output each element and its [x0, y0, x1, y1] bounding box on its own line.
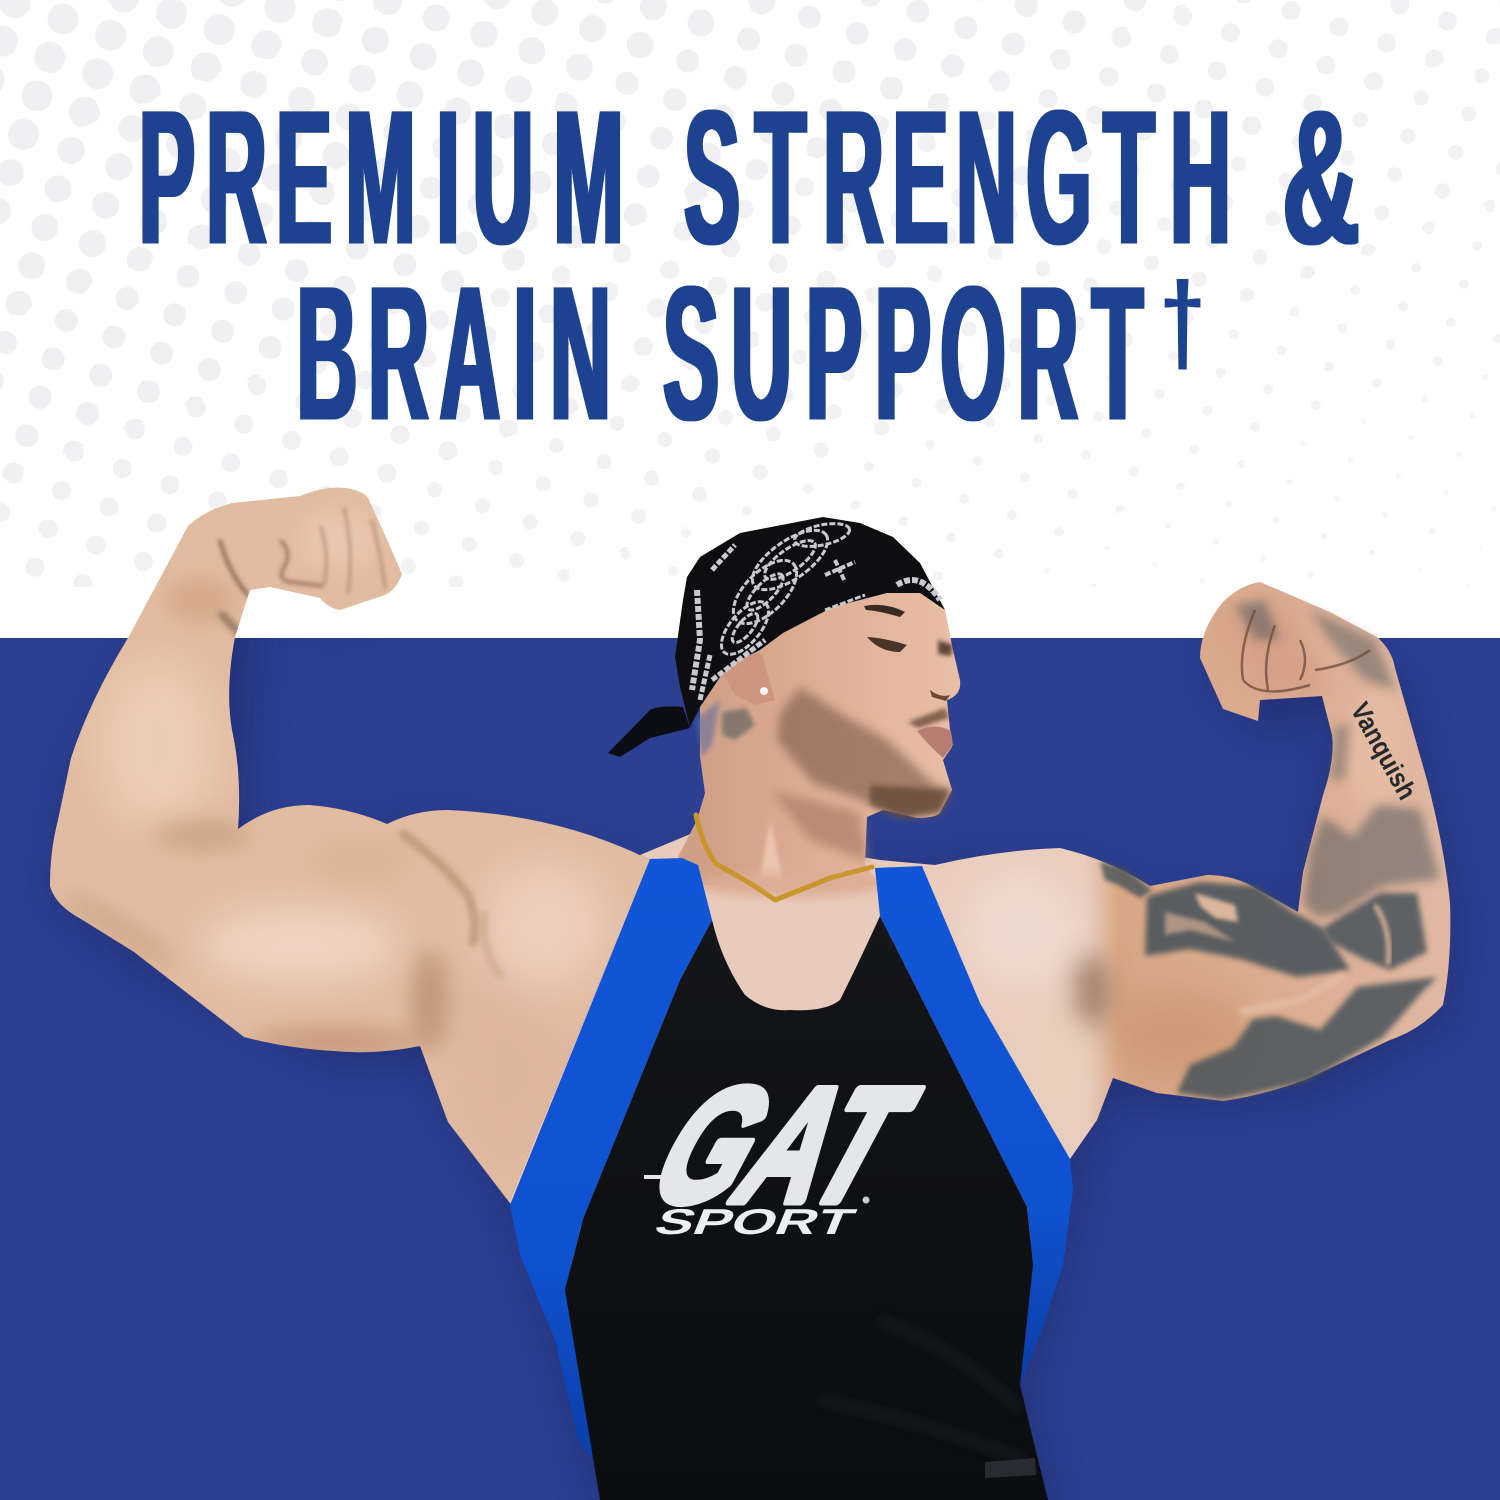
athlete: right arm and chest — [509, 582, 1450, 1300]
tattoo: chest strip — [1100, 862, 1152, 898]
title: STRENGTH — [684, 71, 1231, 285]
bandana: knot tail — [608, 706, 690, 757]
athlete: neck and face — [678, 593, 960, 897]
neck: centre highlight — [760, 820, 785, 890]
tattoos on right arm — [1100, 600, 1440, 1100]
tank top: fabric folds — [820, 1320, 1025, 1460]
neck: under-chin shadow — [770, 790, 868, 862]
face: chin beard — [870, 785, 950, 818]
face: lips — [917, 726, 953, 758]
tattoo: cloud highlight — [1240, 975, 1345, 1012]
face: earring — [760, 687, 768, 695]
tattoo: lower arm clouds — [1177, 977, 1437, 1100]
tattoo: forearm lettering: Vanquish — [1345, 697, 1422, 805]
title: SUPPORT — [663, 247, 1143, 461]
face: nostril — [930, 690, 950, 701]
tattoo: cloud gap — [1375, 905, 1389, 965]
title: BRAIN — [297, 247, 611, 461]
title — [139, 70, 1360, 461]
logo: GAT SPORT: GAT — [624, 1054, 942, 1236]
tank top: blue left panel — [510, 858, 712, 1470]
face: ear — [722, 652, 775, 705]
soft shadow behind the athlete — [56, 638, 1460, 1500]
title: & — [1282, 70, 1360, 284]
photo: flexing athlete — [50, 488, 1450, 1500]
face: eyebrow — [864, 605, 905, 617]
tattoo: dark forearm cloud — [1323, 893, 1427, 970]
logo: GAT SPORT: SPORT — [649, 1201, 861, 1242]
tank top: hem tag — [985, 1458, 1036, 1478]
tank top: blue right panel — [875, 866, 1073, 1385]
tattoo: forearm marks — [1330, 725, 1350, 780]
tattoo: wrist ink — [1310, 610, 1395, 690]
face: closed eye — [867, 637, 907, 652]
title: † — [1162, 260, 1203, 387]
neck: tattoo — [722, 708, 755, 740]
necklace — [696, 815, 872, 900]
tattoo: helmet on forearm — [1303, 805, 1440, 917]
bandana: black headscarf with paisley — [675, 517, 945, 727]
chest: neck-to-chest blend — [695, 873, 885, 897]
right fist: finger lines — [1242, 610, 1370, 691]
title: PREMIUM — [139, 71, 624, 285]
background: navy lower panel — [0, 638, 1500, 1500]
background: halftone dot pattern — [0, 0, 1500, 587]
tank top: black body — [565, 916, 1048, 1500]
tattoo: fist ink — [1235, 600, 1280, 640]
neck: faded hair — [695, 700, 720, 757]
face: eye socket shadow — [938, 640, 953, 656]
face: stubble — [777, 687, 952, 817]
tattoo: tiger on upper arm — [1145, 882, 1350, 977]
face: moustache — [908, 708, 949, 728]
athlete: left arm and fist — [50, 488, 650, 1202]
